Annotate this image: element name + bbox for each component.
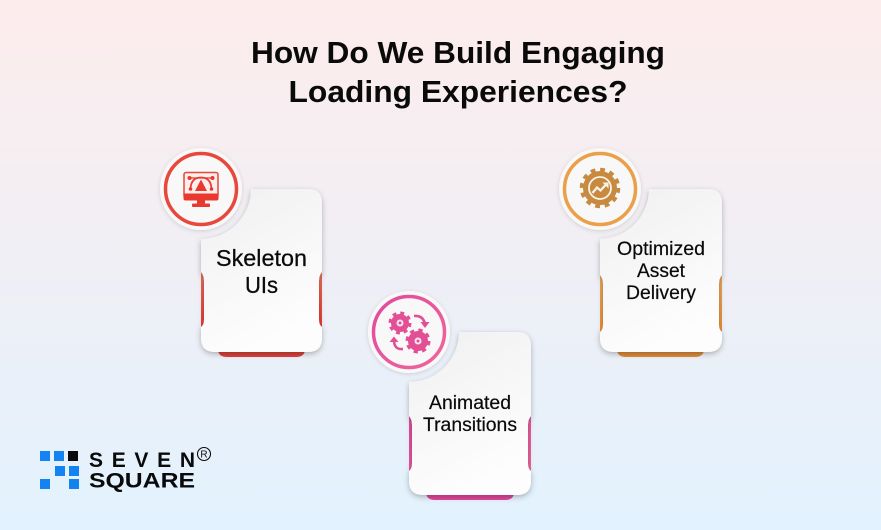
- icon: gear with growth arrow: [582, 170, 618, 206]
- logo: Seven Square: [40, 448, 210, 492]
- label: Optimized Asset Delivery: Delivery: [626, 283, 697, 304]
- title: How Do We Build Engaging: [251, 35, 665, 70]
- bottom tab: Animated Transitions: [426, 488, 514, 500]
- label: Skeleton UIs: UIs: [245, 272, 278, 298]
- card: Optimized Asset Delivery: [600, 189, 722, 352]
- label: Animated Transitions: Animated: [429, 393, 511, 414]
- label: Skeleton UIs: [216, 245, 307, 298]
- logo mark: [40, 451, 79, 489]
- label: Skeleton UIs: Skeleton: [216, 245, 307, 271]
- side tabs: Optimized Asset Delivery: [600, 275, 722, 332]
- logo wordmark: SEVEN: [89, 449, 195, 472]
- side tabs: Skeleton UIs: [201, 272, 322, 327]
- registered mark: R: [200, 450, 208, 460]
- title: [251, 35, 665, 109]
- badge: Animated Transitions: [368, 291, 450, 373]
- card: Skeleton UIs: [201, 189, 322, 352]
- label: Optimized Asset Delivery: [617, 239, 705, 304]
- icon: design monitor: [184, 172, 218, 207]
- badge: Skeleton UIs: [160, 148, 242, 230]
- panel: Optimized Asset Delivery: [559, 148, 722, 357]
- registered mark: [198, 448, 210, 460]
- badge: Optimized Asset Delivery: [559, 148, 641, 230]
- icon: gears and arrows: [390, 313, 430, 352]
- logo wordmark: [89, 449, 195, 492]
- label: Animated Transitions: [423, 393, 517, 436]
- panel: Skeleton UIs: [160, 148, 322, 357]
- panel: Animated Transitions: [368, 291, 531, 500]
- label: Optimized Asset Delivery: Asset: [637, 261, 686, 282]
- label: Optimized Asset Delivery: Optimized: [617, 239, 705, 260]
- side tabs: Animated Transitions: [409, 416, 531, 471]
- label: Animated Transitions: Transitions: [423, 415, 517, 436]
- card: Animated Transitions: [409, 332, 531, 495]
- bottom tab: Skeleton UIs: [218, 345, 305, 357]
- bottom tab: Optimized Asset Delivery: [617, 345, 704, 357]
- logo wordmark: SQUARE: [89, 470, 195, 492]
- title: Loading Experiences?: [288, 74, 628, 109]
